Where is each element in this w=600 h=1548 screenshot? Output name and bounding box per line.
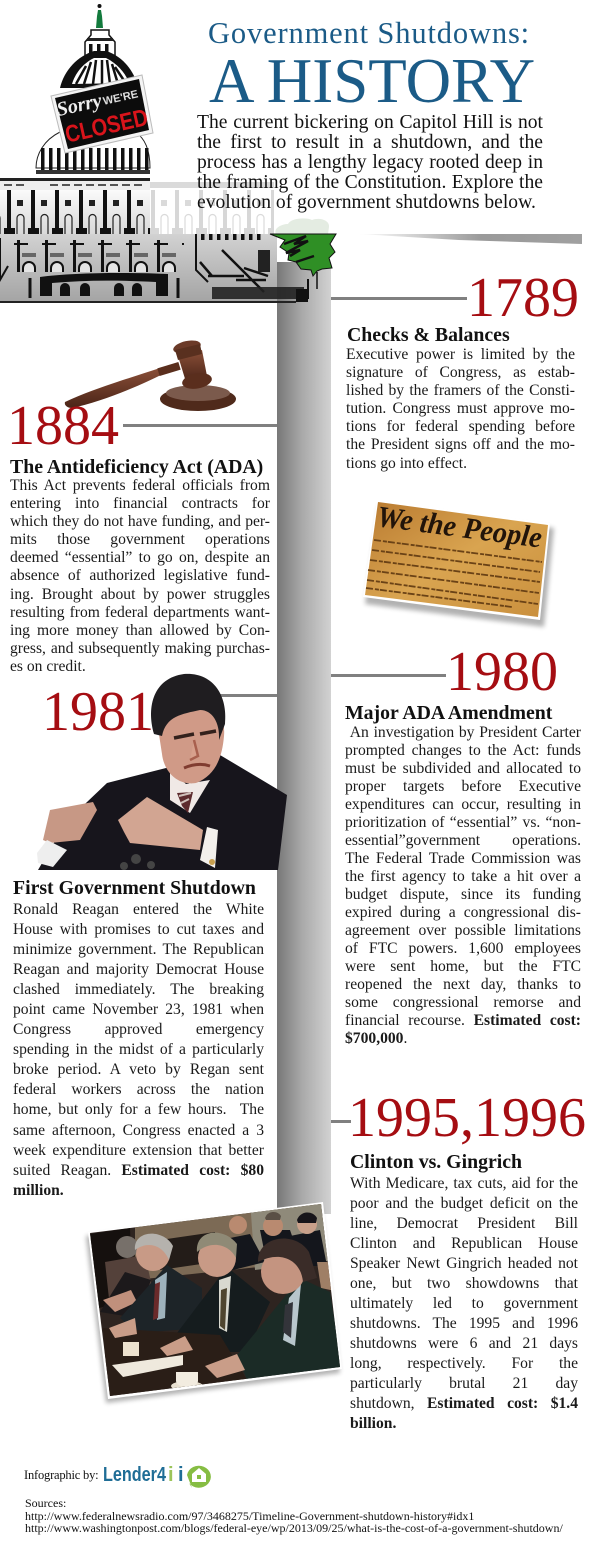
clinton — [177, 1267, 270, 1352]
capitol building illustration — [0, 4, 337, 303]
dole — [237, 1278, 342, 1380]
text: major ada amendment: proper targets before Executive — [345, 778, 581, 795]
text: antideficiency act: resulting from federal departments want- — [10, 604, 270, 621]
title line: a history: A HISTORY — [209, 46, 535, 116]
year 1980: 1980 — [446, 641, 558, 703]
intro text: process has a lengthy legacy rooted deep in — [197, 152, 543, 173]
connector 1884 — [123, 424, 277, 427]
heading: clinton vs gingrich: Clinton vs. Gingrich — [350, 1151, 522, 1173]
icon: closed sign: CLOSED — [63, 104, 151, 149]
text: first government shutdown: broke period. A veto by Regan sent — [13, 1061, 264, 1078]
text: major ada amendment: must be subdivided and allocated to — [345, 760, 581, 777]
text: first government shutdown: million. — [13, 1182, 64, 1199]
right hand — [118, 797, 203, 850]
sources: Sources: — [25, 1496, 66, 1510]
icon: statue on dome — [95, 4, 105, 28]
text: antideficiency act — [10, 477, 270, 675]
text: major ada amendment: An investigation by President Carter — [350, 724, 581, 741]
text: first government shutdown: spending in the midst of a particularly — [13, 1041, 264, 1058]
left hand — [43, 802, 97, 843]
text: first government shutdown: point came November 23, 1981 when — [13, 1001, 264, 1018]
logo: lender4: i — [178, 1464, 184, 1486]
text: major ada amendment: of FTC powers. 1,600 employees — [345, 940, 581, 957]
text: major ada amendment: budget dispute, since its funding — [345, 886, 581, 903]
text: antideficiency act: mits those government operations — [10, 531, 270, 548]
capitol dome — [36, 30, 150, 174]
text: clinton vs gingrich: line, Democrat President Bill — [350, 1215, 578, 1232]
year 1789: 1789 — [467, 267, 579, 329]
sources: http://www.federalnewsradio.com/97/3468275/Timeline-Government-shutdown-history#idx1 — [25, 1508, 474, 1522]
left cuff — [37, 840, 67, 867]
text: checks and balances: tions go into effect. — [346, 455, 467, 472]
text: major ada amendment: expenditures can occur, resulting in — [345, 796, 581, 813]
text: first government shutdown: same afternoon, Congress enacted a 3 — [13, 1122, 264, 1139]
icon: closed sign: WE'RE — [102, 88, 139, 108]
gingrich — [120, 1265, 202, 1333]
left figure — [116, 1236, 138, 1258]
connector 1980 — [331, 674, 446, 677]
text: checks and balances: Executive power is limited by the — [346, 346, 575, 363]
text: major ada amendment: were sent home, but the FTC — [345, 958, 581, 975]
text: first government shutdown: home, but only for a few hours. The — [13, 1101, 264, 1118]
intro text — [197, 112, 543, 213]
year 1995 1996: 1995,1996 — [348, 1087, 586, 1149]
text: clinton vs gingrich: Clinton and Republican House — [350, 1235, 578, 1252]
image: reagan portrait — [37, 674, 287, 870]
timeline spine — [277, 262, 331, 1214]
text: antideficiency act: es on credit. — [10, 658, 86, 675]
year 1884: 1884 — [7, 395, 119, 457]
text: antideficiency act: ing. Brought about by power struggles — [10, 586, 270, 603]
text: antideficiency act: entering into financial contracts for — [10, 495, 270, 512]
logo: lender4 — [103, 1464, 211, 1488]
intro text: The current bickering on Capitol Hill is not — [197, 112, 543, 133]
text: checks and balances: tions for federal spending before — [346, 418, 575, 435]
text: first government shutdown: minimize government. The Republican — [13, 941, 264, 958]
text: major ada amendment: agreement over possible limitations — [345, 922, 581, 939]
text: major ada amendment: prompted changes to the Act: funds — [345, 742, 581, 759]
top shadow bar — [358, 234, 582, 244]
logo: lender4: Lender4 — [103, 1464, 167, 1486]
icon: closed sign — [51, 75, 153, 153]
connector 1981 — [218, 694, 277, 697]
text: major ada amendment: $700,000. — [345, 1030, 407, 1047]
capitol main building — [0, 178, 308, 303]
text: antideficiency act: This Act prevents federal officials from — [10, 477, 270, 494]
text: first government shutdown: Congress approved emergency — [13, 1021, 264, 1038]
heading: checks and balances: Checks & Balances — [347, 324, 510, 346]
heading: major ada amendment: Major ADA Amendment — [345, 702, 552, 724]
text: clinton vs gingrich: billion. — [350, 1415, 396, 1432]
background figures — [230, 1230, 326, 1270]
text: clinton vs gingrich: shutdowns were 6 and 21 days — [350, 1335, 578, 1352]
sources: http://www.washingtonpost.com/blogs/federal-eye/wp/2013/09/25/what-is-the-cost-of-a-government-shutdown/ — [25, 1521, 563, 1535]
icon: closed sign: Sorry — [55, 90, 104, 121]
logo: lender4: i — [168, 1464, 174, 1486]
text: first government shutdown: clashed immediately. The breaking — [13, 981, 264, 998]
text: major ada amendment: prioritization of “essential” vs. “non- — [345, 814, 581, 831]
text: first government shutdown: week expenditure extension that better — [13, 1142, 264, 1159]
jacket — [38, 755, 287, 870]
text: clinton vs gingrich: ultimately led to government — [350, 1295, 578, 1312]
text: clinton vs gingrich: shutdown, Estimated cost: $1.4 — [350, 1395, 578, 1412]
text: clinton vs gingrich: long, respectively. For the — [350, 1355, 578, 1372]
heading: antideficiency act: The Antideficiency Act (ADA) — [10, 456, 263, 478]
hands — [109, 1318, 245, 1378]
text: first government shutdown: federal workers across the nation — [13, 1081, 264, 1098]
hair — [151, 674, 225, 740]
text: clinton vs gingrich: poor and the budget deficit on the — [350, 1195, 578, 1212]
intro text: the framing of the Constitution. Explore the — [197, 172, 543, 193]
year 1981: 1981 — [42, 681, 154, 743]
text: antideficiency act: ing more money than allowed by Con- — [10, 622, 270, 639]
text: checks and balances: signature of Congress, as estab- — [346, 364, 575, 381]
text: major ada amendment — [345, 724, 581, 1047]
text: major ada amendment: The Federal Trade Commission was — [345, 850, 581, 867]
text: antideficiency act: absence of authorized legislative fund- — [10, 567, 270, 584]
text: checks and balances: tution. Congress must approve mo- — [346, 400, 575, 417]
table — [103, 1328, 247, 1398]
text: antideficiency act: which they do not have funding, and per- — [10, 513, 270, 530]
icon: gavel — [64, 340, 236, 411]
text: clinton vs gingrich: With Medicare, tax cuts, aid for the — [350, 1175, 578, 1192]
text: checks and balances: the President signs off and the mo- — [346, 436, 575, 453]
text: major ada amendment: financial recourse. Estimated cost: — [345, 1012, 581, 1029]
text: clinton vs gingrich: particularly brutal 21 day — [350, 1375, 578, 1392]
text: major ada amendment: reopened the next day, thanks to — [345, 976, 581, 993]
text: antideficiency act: gress, and subsequently making purchas- — [10, 640, 270, 657]
image: we the people document: We the People — [375, 500, 544, 555]
text: first government shutdown: Reagan and majority Democrat House — [13, 961, 264, 978]
intro text: evolution of government shutdowns below. — [197, 192, 536, 213]
title — [208, 16, 535, 116]
text: clinton vs gingrich — [350, 1175, 578, 1432]
text: major ada amendment: essential”government operations. — [345, 832, 581, 849]
heading: first government shutdown: First Government Shutdown — [13, 877, 256, 899]
image: budget meeting photo — [84, 1202, 342, 1405]
text: checks and balances — [346, 346, 575, 472]
text: major ada amendment: expired during a congressional dis- — [345, 904, 581, 921]
text: major ada amendment: some congressional remorse and — [345, 994, 581, 1011]
title line: government shutdowns: Government Shutdowns: — [208, 16, 530, 50]
text: first government shutdown: Ronald Reagan entered the White — [13, 901, 264, 918]
credit: infographic by: Infographic by: — [24, 1468, 98, 1482]
text: clinton vs gingrich: shutdowns. The 1995 and 1996 — [350, 1315, 578, 1332]
text: first government shutdown: House with promises to cut taxes and — [13, 921, 264, 938]
image: we the people document — [363, 500, 556, 629]
connector 1995 — [331, 1120, 351, 1123]
connector 1789 — [331, 297, 467, 300]
intro text: the first to result in a shutdown, and the — [197, 132, 543, 153]
icon: tree — [270, 218, 336, 289]
text: first government shutdown: suited Reagan. Estimated cost: $80 — [13, 1162, 264, 1179]
text: major ada amendment: the first agency to take a hit over a — [345, 868, 581, 885]
sources — [25, 1496, 563, 1535]
text: clinton vs gingrich: Speaker Newt Gingrich headed not — [350, 1255, 578, 1272]
text: clinton vs gingrich: one, but two showdowns that — [350, 1275, 578, 1292]
text: checks and balances: lished by the framers of the Consti- — [346, 382, 575, 399]
text: antideficiency act: deemed “essential” to go on, despite an — [10, 549, 270, 566]
face — [157, 696, 224, 783]
right cuff — [200, 827, 218, 868]
text: first government shutdown — [13, 901, 264, 1199]
